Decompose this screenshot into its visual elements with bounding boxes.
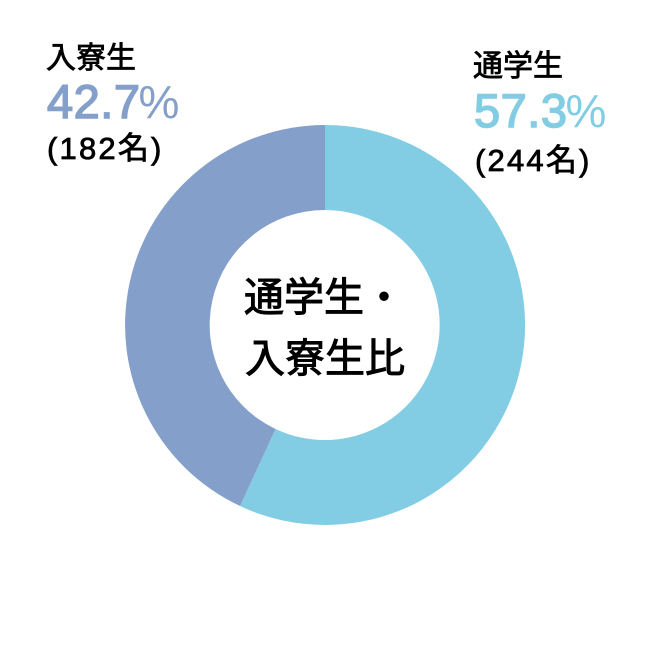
center title: 入寮生比 (245, 326, 405, 384)
center title (244, 265, 405, 384)
label: commuting students: (244名) (475, 143, 592, 178)
label: dormitory students (46, 33, 179, 166)
label: dormitory students: 42.7% (47, 75, 179, 128)
label: commuting students: 通学生 (473, 41, 563, 85)
label: dormitory students: 入寮生 (46, 33, 136, 77)
label: commuting students: 57.3% (474, 84, 606, 137)
label: dormitory students: (182名) (47, 131, 164, 166)
segment: dormitory students 42.7% (125, 125, 325, 506)
donut chart (125, 125, 525, 525)
label: commuting students (473, 41, 606, 178)
center title: 通学生・ (244, 265, 404, 323)
segment: commuting students 57.3% (240, 125, 525, 525)
